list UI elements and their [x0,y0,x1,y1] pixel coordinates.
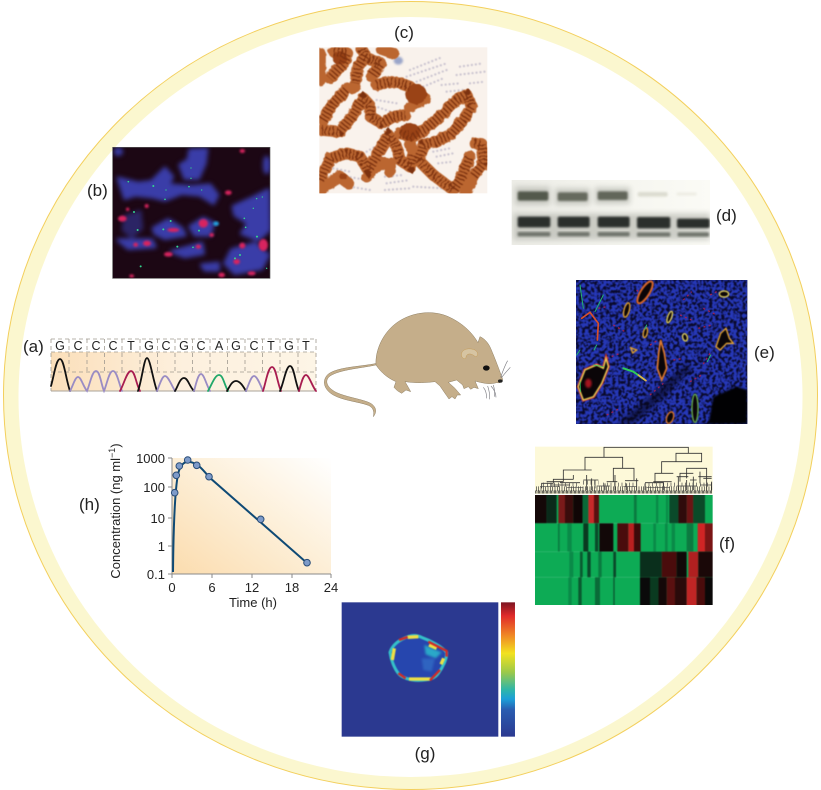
sequence letters: C [249,339,259,353]
chromatogram dashed grid [51,339,316,391]
sequence letters: C [196,339,206,353]
red specks [598,290,717,415]
mouse eye [483,365,490,371]
sequence letters: C [73,339,83,353]
blue tissue texture [576,280,747,424]
tumour section [390,636,447,680]
plot background [172,458,331,574]
sequence letters: C [108,339,118,353]
dendrogram [535,447,713,494]
label (e): (e) [754,343,775,362]
middle bands [518,217,710,228]
heat map row 1 [533,493,714,523]
band halos [513,187,710,240]
label (c): (c) [394,23,414,42]
colour scale bar [501,602,515,737]
y axis title: −1 [107,448,117,458]
sequence letters: T [127,339,135,353]
x tick labels [168,580,338,595]
y tick labels: 1000 [136,451,165,466]
sequence letters: C [91,339,101,353]
green signals [127,167,267,269]
panel (g): tumour imaging map [342,602,515,737]
x axis title: Time (h) [229,595,277,610]
red and green vessel strands [577,285,711,392]
brown epithelial bands [320,49,483,193]
sequence letters: G [284,339,294,353]
x tick labels: 24 [324,580,338,595]
concentration curve [173,462,307,572]
sequence letters: C [161,339,171,353]
sequence letters: A [215,339,224,353]
x tick labels: 12 [245,580,259,595]
heat map [533,493,714,607]
panel (e): vascular immunofluorescence [576,279,747,424]
x tick labels: 6 [208,580,216,595]
panel (b): fluorescence micrograph [113,147,270,278]
whiskers [483,361,510,399]
blood vessels [578,279,733,424]
y tick labels: 100 [143,480,165,495]
panel (d): western blot [512,180,710,245]
lower bands [518,232,709,237]
label (b): (b) [87,181,108,200]
heat map stripes [533,493,714,607]
y tick labels: 1 [158,539,165,554]
y axis title: Concentration (ng ml [108,458,123,579]
y tick labels: 0.1 [147,567,165,582]
sequence letters: G [179,339,189,353]
sequence letters: T [267,339,275,353]
pale cells [333,57,485,190]
label (d): (d) [716,206,737,225]
heat map row 3 [533,552,714,577]
y axis title: ) [108,443,123,448]
heat map row 2 [533,523,714,552]
image background [342,602,498,737]
data points [171,457,310,566]
sequence letters: G [231,339,241,353]
heat map row 4 [533,577,714,607]
dark tissue regions [708,387,747,424]
x tick labels: 0 [168,580,176,595]
red signals [118,149,268,278]
sequence letters [55,339,310,353]
mouse nose [498,379,503,383]
label (f): (f) [719,534,735,553]
panel (c): immunohistochemistry stain [319,47,487,193]
panel (a): DNA sequencing chromatogram [51,339,316,391]
panel (h): pharmacokinetic chart [107,443,338,610]
chromatogram background [51,352,316,391]
y tick labels [136,451,165,582]
label (h): (h) [79,495,100,514]
upper bands [518,191,697,201]
mouse ear [461,349,478,359]
sequence letters: T [302,339,310,353]
sequence letters: G [144,339,154,353]
sequence letters: G [55,339,65,353]
axes [168,458,331,578]
label (a): (a) [23,337,44,356]
mouse illustration [324,313,510,417]
blue nuclei [115,149,269,273]
y tick labels: 10 [151,511,165,526]
trace peaks [51,358,316,391]
panel (f): clustered heat map [533,447,714,607]
mouse body [376,313,503,399]
x tick labels: 18 [285,580,299,595]
label (g): (g) [415,744,435,763]
mouse tail [324,363,377,417]
